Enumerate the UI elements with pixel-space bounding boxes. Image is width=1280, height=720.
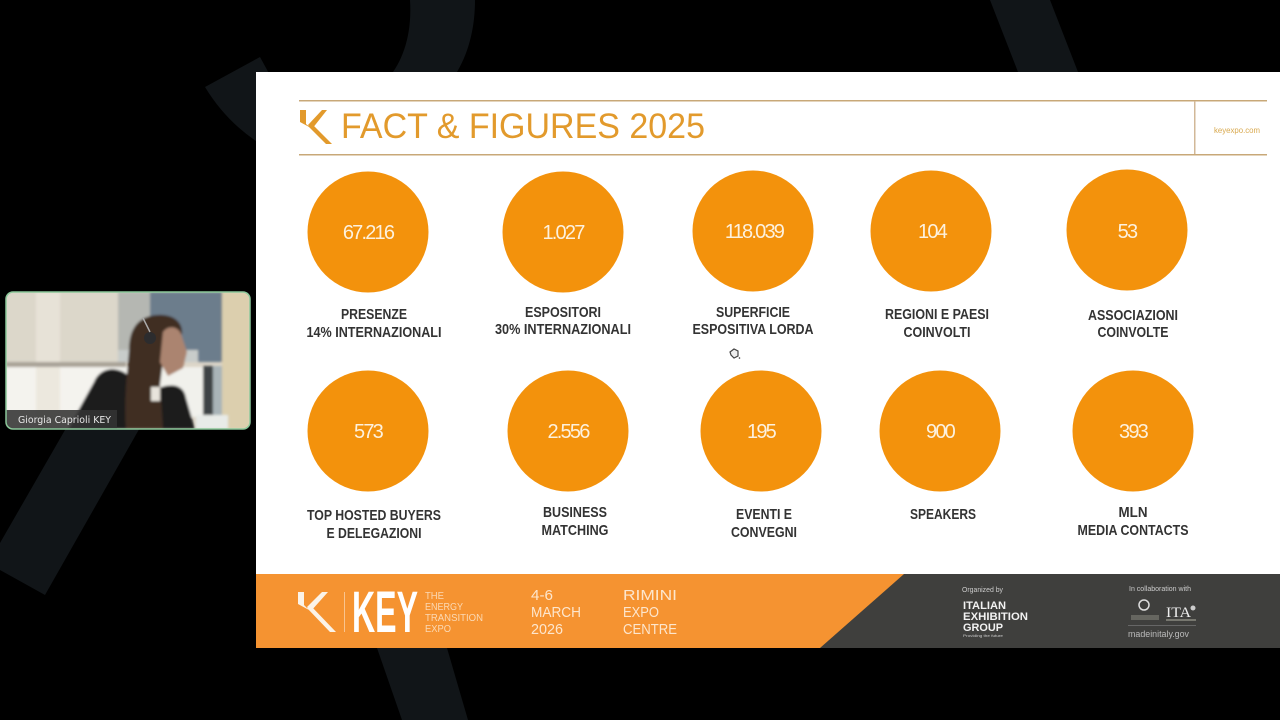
venue: EXPO bbox=[623, 604, 659, 621]
stat: speakers bbox=[880, 370, 1000, 523]
stat: eventi: 195 bbox=[747, 421, 777, 443]
stat: espositori bbox=[495, 172, 631, 338]
venue bbox=[623, 587, 677, 638]
stat: media contacts: MEDIA CONTACTS bbox=[1078, 522, 1188, 539]
icon: K logo white bbox=[298, 592, 336, 632]
stat: regioni: 104 bbox=[918, 221, 948, 243]
date: 4-6 bbox=[531, 587, 553, 604]
icon: emblem bbox=[1139, 600, 1149, 610]
title: FACT & FIGURES 2025 bbox=[341, 107, 705, 146]
date bbox=[531, 587, 581, 638]
stat: buyers: E DELEGAZIONI bbox=[326, 525, 422, 542]
stat: speakers: SPEAKERS bbox=[910, 506, 976, 523]
stat: espositori: 30% INTERNAZIONALI bbox=[495, 321, 631, 338]
collaboration bbox=[1128, 586, 1196, 639]
stat: matching: 2.556 bbox=[547, 421, 590, 443]
footer band bbox=[256, 574, 1280, 648]
tagline: ENERGY bbox=[425, 601, 463, 613]
icon: K logo bbox=[300, 110, 332, 144]
stat: superficie: SUPERFICIE bbox=[716, 304, 790, 321]
icon: hand cursor bbox=[730, 349, 740, 359]
stat: matching bbox=[508, 370, 628, 539]
stat: eventi bbox=[700, 370, 822, 541]
stat: associazioni: ASSOCIAZIONI bbox=[1088, 307, 1178, 324]
stat: eventi: EVENTI E bbox=[736, 506, 792, 523]
header bbox=[299, 100, 1267, 156]
stat: superficie bbox=[692, 170, 814, 338]
stat: media contacts: MLN bbox=[1118, 504, 1148, 521]
stat: eventi: CONVEGNI bbox=[731, 524, 797, 541]
stat: regioni: REGIONI E PAESI bbox=[885, 306, 989, 323]
collaboration: ITA bbox=[1166, 605, 1191, 621]
stat: buyers: 573 bbox=[354, 421, 384, 443]
stat: espositori: 1.027 bbox=[542, 222, 585, 244]
tagline: THE bbox=[425, 590, 444, 602]
venue: CENTRE bbox=[623, 621, 677, 638]
stat: buyers bbox=[307, 370, 441, 542]
speaker name tag bbox=[6, 410, 117, 429]
stat: regioni bbox=[870, 170, 992, 341]
stat: espositori: ESPOSITORI bbox=[525, 304, 601, 321]
stat: superficie: 118.039 bbox=[725, 221, 785, 243]
organizer bbox=[962, 587, 1028, 638]
stat: speakers: 900 bbox=[926, 421, 956, 443]
date: MARCH bbox=[531, 604, 581, 621]
icon: headset bbox=[144, 332, 156, 344]
venue: RIMINI bbox=[623, 587, 677, 604]
stat: matching: BUSINESS bbox=[543, 504, 607, 521]
slide bbox=[256, 72, 1280, 648]
organizer: GROUP bbox=[963, 622, 1003, 634]
stat: presenze: 67.216 bbox=[343, 222, 395, 244]
KEY wordmark: KEY bbox=[352, 580, 418, 645]
stat: matching: MATCHING bbox=[542, 522, 608, 539]
organizer: Providing the future bbox=[963, 633, 1004, 638]
person bbox=[69, 367, 130, 428]
stat: buyers: TOP HOSTED BUYERS bbox=[307, 507, 441, 524]
stat: associazioni: COINVOLTE bbox=[1098, 324, 1168, 341]
website link: keyexpo.com bbox=[1214, 126, 1260, 135]
speaker video tile bbox=[6, 292, 250, 429]
collaboration: madeinitaly.gov bbox=[1128, 629, 1189, 639]
stat: presenze: 14% INTERNAZIONALI bbox=[306, 324, 442, 341]
collaboration: In collaboration with bbox=[1129, 586, 1191, 593]
stat: presenze bbox=[306, 172, 442, 341]
stat: superficie: ESPOSITIVA LORDA bbox=[692, 321, 814, 338]
organizer: Organized by bbox=[962, 587, 1003, 594]
speaker name tag: Giorgia Caprioli KEY bbox=[18, 415, 111, 426]
date: 2026 bbox=[531, 621, 563, 638]
stat: regioni: COINVOLTI bbox=[904, 324, 970, 341]
organizer: ITALIAN bbox=[963, 600, 1006, 612]
stat: associazioni: 53 bbox=[1118, 221, 1138, 243]
tagline: TRANSITION bbox=[425, 612, 483, 624]
organizer: EXHIBITION bbox=[963, 611, 1028, 623]
stat: media contacts: 393 bbox=[1119, 421, 1149, 443]
tagline bbox=[425, 590, 483, 635]
tagline: EXPO bbox=[425, 623, 451, 635]
stat: media contacts bbox=[1072, 370, 1194, 539]
stat: associazioni bbox=[1066, 170, 1188, 341]
stat: presenze: PRESENZE bbox=[341, 306, 407, 323]
